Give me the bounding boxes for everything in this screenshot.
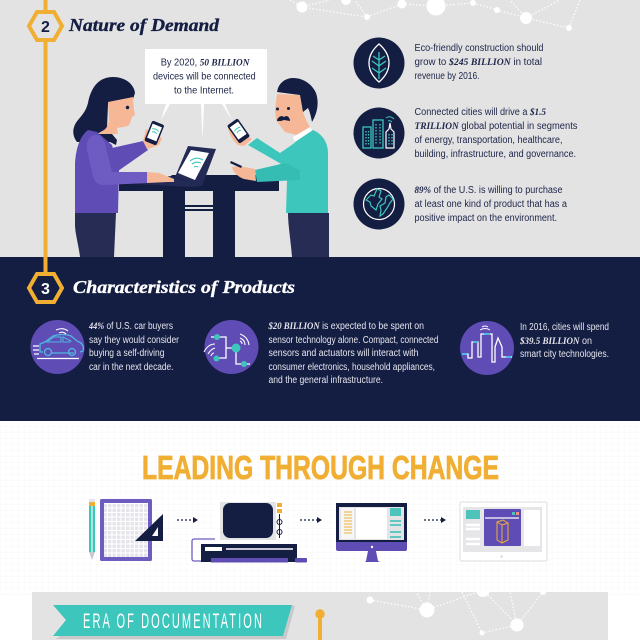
icon: pencil [89,499,95,560]
badge: number 2: 2 [41,19,50,36]
text: eco-friendly construction: revenue by 2016. [414,71,480,82]
front arm [87,135,147,185]
text: 20 billion sensor technology: $20 BILLION is expected to be spent on [268,321,424,332]
text: 89% of the U.S.: positive impact on the environment. [414,213,557,224]
lower arm [255,163,300,182]
arrow: computer to desktop [300,517,322,523]
badge: number 2 [29,12,62,40]
trousers [75,213,116,257]
icon: leaf [354,38,404,88]
illustration: woman [73,77,174,257]
phone [144,120,164,146]
hair [73,77,135,145]
text: connected cities: building, infrastructure, and governance. [414,149,576,160]
text: eco-friendly construction: Eco-friendly construction should [414,43,544,54]
hair [277,78,318,122]
text: 89% of the U.S.: 89% of the U.S. is willing to purchase [414,185,563,196]
icon: vintage computer [192,498,307,562]
torso [283,130,328,213]
text: 20 billion sensor technology [268,321,438,386]
text: 20 billion sensor technology: and the general infrastructure. [268,375,383,386]
panel: era of documentation [32,592,608,640]
callout: 50 billion devices: By 2020, 50 BILLION [161,58,250,68]
face [97,97,135,134]
icon: grid paper and set square [100,499,163,561]
icon: connected city [354,108,404,158]
text: 39.5 billion smart city: In 2016, cities will spend [520,322,609,333]
icon: tablet with 3d model [460,502,547,561]
callout: 50 billion devices: to the Internet. [174,86,234,96]
panel: characteristics of products [0,257,640,421]
text: connected cities [414,107,578,160]
network decoration top [290,0,580,31]
text: 44% of car buyers: car in the next decade. [89,362,174,373]
text: eco-friendly construction: grow to $245 BILLION in total [414,57,542,68]
banner: era of documentation [53,605,295,639]
torso [75,130,119,213]
text: connected cities: TRILLION global potential in segments [414,121,578,132]
icon: sensors [204,320,258,374]
text: 89% of the U.S.: at least one kind of product that has a [414,199,568,210]
text: eco-friendly construction [414,43,544,82]
trousers [288,213,329,257]
timeline pin [315,609,325,640]
text: 44% of car buyers [88,321,180,373]
heading: characteristics of products: Characteristics of Products [73,277,295,297]
text: 44% of car buyers: say they would consider [89,335,180,346]
text: 20 billion sensor technology: sensor technology alone. Compact, connected [268,335,438,346]
heading: nature of demand: Nature of Demand [68,15,220,35]
hand on laptop [147,172,174,183]
text: 20 billion sensor technology: sensors and actuators will interact with [268,348,418,359]
upper hand [228,128,252,146]
text: 44% of car buyers: 44% of U.S. car buyers [88,321,173,332]
illustration: table [119,175,279,257]
face [275,94,310,135]
lower hand and small phone [232,166,256,181]
text: 39.5 billion smart city: smart city technologies. [520,349,609,360]
raised arm [248,138,296,165]
timeline line [44,0,48,275]
collar [293,127,313,142]
eyes and moustache [276,108,279,110]
panel: nature of demand [0,0,640,257]
icon: globe [354,178,404,230]
icon: smart city [460,321,514,375]
text: connected cities: of energy, transportation, healthcare, [414,135,562,146]
raised arm [112,141,148,171]
badge: number 3 [29,274,62,302]
callout: 50 billion devices [145,49,267,140]
arrow: drafting to computer [177,517,198,523]
illustration: laptop [135,146,216,187]
badge: number 3: 3 [41,281,50,298]
title: leading through change: LEADING THROUGH CHANGE [142,449,499,486]
text: 44% of car buyers: buying a self-driving [89,348,164,359]
icon: self-driving car [30,320,84,374]
icon: desktop monitor [336,503,407,562]
text: 89% of the U.S. [414,185,568,224]
network decoration bottom [366,592,546,636]
arrow: desktop to tablet [424,517,446,523]
text: 39.5 billion smart city: $39.5 BILLION on [519,336,592,347]
hand with phone [143,129,162,149]
text: 20 billion sensor technology: consumer electronics, household appliances, [268,362,435,373]
illustration: man [227,78,329,257]
text: connected cities: Connected cities will drive a $1.5 [414,107,546,118]
callout: 50 billion devices: devices will be connected [153,72,256,82]
text: 39.5 billion smart city [519,322,609,360]
phone [227,118,250,144]
banner: era of documentation: ERA OF DOCUMENTATION [83,610,264,633]
